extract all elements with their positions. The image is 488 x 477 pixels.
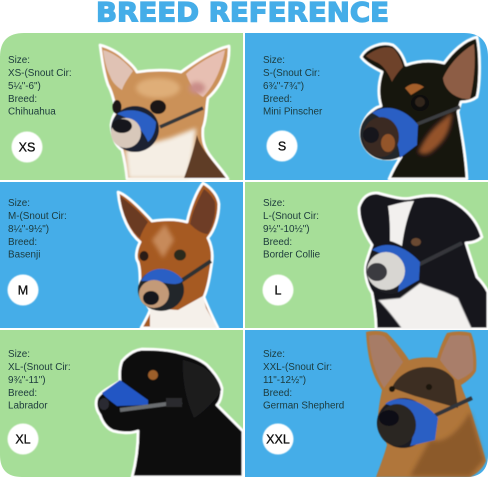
text: S size details: Mini Pinscher (263, 106, 323, 118)
panel: S Mini Pinscher (245, 33, 488, 180)
text: XXL size details: Breed: (263, 388, 292, 399)
badge: M: M (18, 284, 28, 298)
text: XL size details: 9¾"-11") (8, 375, 46, 386)
panel: XS Chihuahua (0, 33, 243, 180)
badge: S (266, 130, 298, 162)
text: XL size details: Labrador (8, 400, 48, 412)
text: S size details (263, 55, 323, 118)
panel: XXL German Shepherd (245, 330, 488, 477)
text: XS size details: 5¼"-6") (8, 81, 41, 92)
dog: German Shepherd (366, 331, 486, 477)
text: M size details: Size: (8, 198, 30, 209)
badge: XXL: XXL (266, 432, 290, 446)
text: XS size details: Chihuahua (8, 106, 56, 118)
badge: L (262, 274, 294, 306)
badge: M (8, 274, 38, 306)
text: XXL size details: Size: (263, 349, 285, 360)
text: XXL size details (263, 349, 344, 412)
text: S size details: Breed: (263, 94, 292, 105)
text: XL size details: Size: (8, 349, 30, 360)
dog: Chihuahua (100, 45, 229, 179)
text: XS size details: XS-(Snout Cir: (8, 68, 72, 79)
text: S size details: Size: (263, 55, 285, 66)
text: XXL size details: German Shepherd (263, 400, 344, 412)
badge: XS: XS (19, 140, 35, 154)
panel: L Border Collie (245, 182, 488, 329)
badge: L: L (275, 284, 282, 298)
badge: S: S (278, 140, 286, 154)
text: XS size details: Breed: (8, 94, 37, 105)
text: XS size details: Size: (8, 55, 30, 66)
text: XXL size details: 11"-12½") (263, 375, 306, 386)
dog: Mini Pinscher (360, 37, 480, 179)
badge: XL: XL (15, 432, 31, 446)
text: L size details (263, 198, 321, 260)
text: M size details: M-(Snout Cir: (8, 211, 67, 222)
text: L size details: L-(Snout Cir: (263, 211, 319, 222)
text: XS size details (8, 55, 72, 118)
text: XL size details: XL-(Snout Cir: (8, 362, 71, 373)
text: M size details: Breed: (8, 237, 37, 248)
badge: XS (12, 132, 42, 162)
text: XL size details (8, 349, 71, 412)
panel: XL Labrador (0, 330, 243, 477)
badge: XL (8, 424, 38, 454)
dog: Labrador (96, 349, 243, 477)
text: L size details: Breed: (263, 237, 292, 248)
text: L size details: 9½"-10½") (263, 224, 310, 235)
text: XL size details: Breed: (8, 388, 37, 399)
text: M size details (8, 198, 67, 260)
text: S size details: 6¾"-7¾") (263, 81, 304, 92)
text: L size details: Size: (263, 198, 285, 209)
text: XXL size details: XXL-(Snout Cir: (263, 362, 332, 373)
text: M size details: Basenji (8, 250, 40, 260)
text: S size details: S-(Snout Cir: (263, 68, 320, 79)
panel: M Basenji (0, 182, 243, 328)
text: L size details: Border Collie (263, 250, 321, 260)
badge: XXL (262, 424, 294, 454)
text: M size details: 8¼"-9½") (8, 224, 49, 235)
dog: Border Collie (359, 193, 488, 329)
dog: Basenji (118, 183, 219, 328)
